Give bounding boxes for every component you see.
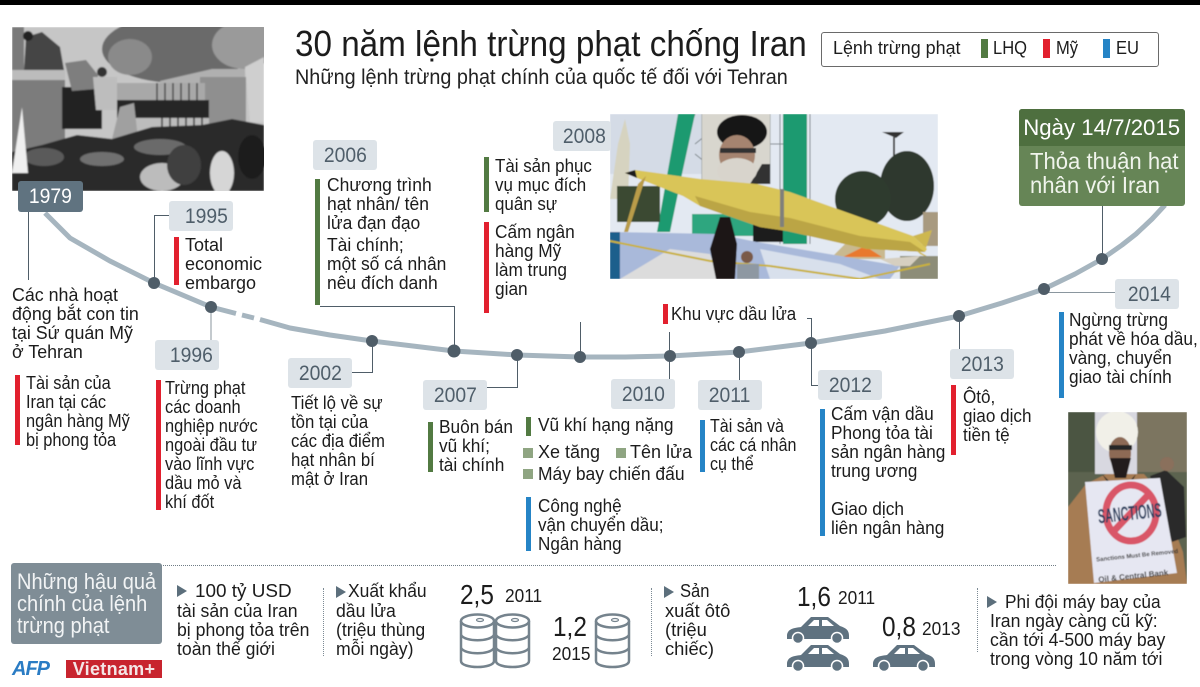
text: 1995 sanctions (185, 235, 262, 293)
year label: 2013 (950, 349, 1014, 379)
text: 1995 sanctions: embargo (185, 273, 256, 293)
number: oil 1.2: 1,2 (553, 611, 587, 642)
text: 2014 sanctions: phát về hóa dầu, (1069, 329, 1198, 349)
text: tanks: Xe tăng (538, 442, 600, 462)
square: missiles (616, 448, 626, 458)
text: 2007 sanctions: vũ khí; (439, 436, 490, 456)
text: 2008 banks: gian (495, 279, 528, 299)
year label: 2002: 2002 (299, 362, 341, 385)
legend swatch: EU blue (1103, 39, 1110, 58)
text: oil exports: Xuất khẩu (348, 581, 427, 601)
year label: 2011 (698, 380, 762, 410)
year label: 1996 (155, 340, 219, 370)
bar: 2010 US oil (663, 304, 668, 324)
year label: 2014 (1115, 279, 1179, 309)
text: 2012 interbank: liên ngân hàng (831, 518, 944, 538)
legend label: Mỹ: Mỹ (1056, 38, 1078, 58)
square: fighter planes (523, 469, 533, 479)
text: 1995 sanctions: Total (185, 235, 223, 255)
text: 2012 oil embargo: Cấm vận dầu (831, 404, 934, 424)
text: 2008 military assets: quân sự (495, 194, 557, 214)
bar: 1979 US (15, 375, 20, 445)
text: 2002 event (291, 393, 385, 489)
arc line (45, 205, 1165, 357)
callout text (1030, 148, 1179, 198)
heading text (17, 569, 156, 638)
text: 2002 event: mật ở Iran (291, 469, 368, 489)
connector lines (28, 205, 1115, 388)
text: 2008 banks: làm trung (495, 260, 567, 280)
year label: 2014: 2014 (1128, 283, 1171, 306)
text: 1979 event: ở Tehran (12, 342, 83, 362)
heading: main consequences (11, 563, 162, 644)
dotted separator (323, 588, 324, 656)
text: 2007 sanctions: tài chính (439, 455, 504, 475)
triangle: frozen assets (177, 585, 187, 597)
text: car production unit (665, 601, 730, 659)
heading text: Những hậu quả (17, 569, 156, 594)
year label: 2007: 2007 (434, 384, 476, 407)
bar: 2012 EU (820, 409, 825, 536)
text: 1979 sanctions: Iran tại các (26, 392, 106, 412)
heading text: trừng phạt (17, 613, 109, 638)
subtitle: Những lệnh trừng phạt chính của quốc tế đối với Tehran (295, 66, 788, 89)
text: 2012 oil embargo: sản ngân hàng (831, 442, 945, 462)
text: 2002 event: các địa điểm (291, 431, 385, 451)
bar: 2014 EU (1059, 312, 1064, 398)
text: 2013 sanctions: tiền tệ (963, 425, 1010, 445)
number: cars 1.6: 1,6 (797, 581, 831, 612)
year label: 1979 (18, 181, 83, 212)
text: 2002 event: Tiết lộ về sự (291, 393, 383, 413)
bar: 1995 US (174, 237, 179, 285)
text: aircraft fleet detail: Iran ngày càng cũ kỹ: (990, 611, 1158, 631)
year: oil 2011: 2011 (505, 586, 542, 606)
text: 1996 sanctions: các doanh (165, 397, 241, 417)
text: frozen assets detail: tài sản của Iran (177, 601, 298, 621)
text: 2012 oil embargo: trung ương (831, 461, 917, 481)
timeline nodes (148, 253, 1108, 363)
text: 1979 sanctions: ngân hàng Mỹ (26, 411, 130, 431)
year label: 2008 (553, 121, 611, 151)
text: oil exports unit (336, 601, 425, 659)
legend title: Lệnh trừng phạt (833, 38, 961, 58)
text: car production unit: xuất ôtô (665, 601, 730, 621)
year label: 2013: 2013 (961, 353, 1003, 376)
bar: 2011 EU (700, 420, 705, 472)
dotted separator (977, 588, 978, 652)
text: 2012 interbank (831, 499, 944, 538)
year label: 1995 (169, 201, 233, 231)
triangle: oil exports (336, 586, 346, 598)
text: 2006 nuclear program: lửa đạn đạo (327, 213, 420, 233)
text: 2012 oil embargo (831, 404, 945, 481)
triangle: aircraft fleet (987, 596, 997, 608)
year label: 2002 (288, 358, 352, 388)
text: 2007 sanctions: Buôn bán (439, 417, 513, 437)
text: frozen assets detail (177, 601, 309, 659)
text: aircraft fleet first line: Phi đội máy bay của (1005, 592, 1161, 612)
photo: sanctions protester (1068, 412, 1187, 584)
text: 2008 banks: hàng Mỹ (495, 241, 561, 261)
text: 1979 event: Các nhà hoạt (12, 285, 118, 305)
year: cars 2011: 2011 (838, 588, 875, 608)
text: 1996 sanctions: khí đốt (165, 492, 214, 512)
text: car production unit: chiếc) (665, 639, 714, 659)
text: oil exports unit: (triệu thùng (336, 620, 425, 640)
top black bar (0, 0, 1200, 5)
text: 2013 sanctions (963, 386, 1031, 445)
bar: 2013 US (951, 385, 956, 455)
text: 2002 event: tồn tại của (291, 412, 368, 432)
text: 1996 sanctions: Trừng phạt (165, 378, 245, 398)
text: 1996 sanctions: nghiệp nước (165, 416, 258, 436)
year label: 2008: 2008 (563, 125, 605, 148)
text: heavy weapons: Vũ khí hạng nặng (538, 415, 673, 435)
year label: 2010 (611, 379, 675, 409)
photo: embassy gate 1979 (12, 27, 264, 191)
text: 2002 event: hạt nhân bí (291, 450, 375, 470)
photo: missile parade (610, 114, 938, 279)
text: oil transport technology: Ngân hàng (538, 534, 622, 554)
text: aircraft fleet detail (990, 611, 1166, 669)
text: oil exports unit: dầu lửa (336, 601, 396, 621)
text: 2013 sanctions: Ôtô, (963, 387, 995, 407)
text: oil transport technology: vận chuyển dầu; (538, 515, 664, 535)
legend (821, 32, 1159, 67)
text: 1996 sanctions: dầu mỏ và (165, 473, 241, 493)
callout header date: Ngày 14/7/2015 (1024, 115, 1180, 140)
text: 2006 nuclear program (327, 175, 432, 233)
callout text: Thỏa thuận hạt (1030, 148, 1179, 174)
text: frozen assets detail: bị phong tỏa trên (177, 620, 309, 640)
icon: one car (873, 645, 935, 671)
text: 1996 sanctions: ngoài đầu tư (165, 435, 257, 455)
text: oil sector: Khu vực dầu lửa (671, 304, 796, 324)
triangle: car production (664, 586, 674, 598)
text: 2012 interbank: Giao dịch (831, 499, 904, 519)
text: 2011 sanctions: các cá nhân (710, 435, 796, 455)
text: aircraft fleet detail: cần tới 4-500 máy bay (990, 630, 1165, 650)
text: 2014 sanctions: Ngừng trừng (1069, 310, 1168, 330)
text: 2014 sanctions: giao tài chính (1069, 367, 1172, 387)
legend label: LHQ: LHQ (993, 38, 1027, 58)
number: oil 2.5: 2,5 (460, 579, 494, 610)
heading text: chính của lệnh (17, 591, 147, 616)
text: 1979 sanctions: Tài sản của (26, 373, 111, 393)
text: 2014 sanctions (1069, 310, 1198, 387)
year label: 1995: 1995 (185, 205, 227, 228)
callout text: nhân với Iran (1030, 172, 1160, 198)
icon: two oil barrels (460, 613, 530, 668)
text: 2006 finance: Tài chính; (327, 235, 404, 255)
text: 2006 nuclear program: hạt nhân/ tên (327, 194, 429, 214)
bar: 2008 UN (484, 157, 489, 212)
text: 2008 banks (495, 222, 575, 299)
text: oil transport technology: Công nghệ (538, 496, 622, 516)
year: oil 2015: 2015 (552, 644, 590, 664)
text: 2007 sanctions (439, 417, 513, 475)
text: aircraft fleet detail: trong vòng 10 năm tới (990, 649, 1162, 669)
text: frozen assets detail: toàn thế giới (177, 639, 275, 659)
photo: sanctions protester: Oil & Central Bank (1098, 568, 1169, 584)
text: frozen assets: 100 tỷ USD (195, 581, 292, 601)
text: fighter planes: Máy bay chiến đấu (538, 464, 685, 484)
text: 2008 banks: Cấm ngân (495, 222, 575, 242)
legend swatch: LHQ green (981, 39, 988, 58)
bar: 1996 US (156, 380, 161, 510)
text: 2008 military assets: Tài sản phục (495, 156, 592, 176)
legend label: EU: EU (1116, 38, 1139, 58)
year: cars 2013: 2013 (922, 619, 960, 639)
dotted separator (651, 588, 652, 656)
year label: 2006 (313, 140, 377, 170)
text: 2006 finance: nêu đích danh (327, 273, 438, 293)
logo: Vietnam+: Vietnam+ (73, 659, 155, 679)
text: 1979 event: động bắt con tin (12, 304, 139, 324)
text: 2008 military assets: vụ mục đích (495, 175, 586, 195)
text: 2008 military assets (495, 156, 592, 214)
title: 30 năm lệnh trừng phạt chống Iran (295, 23, 807, 64)
text: 1979 sanctions (26, 373, 130, 450)
text: 2013 sanctions: giao dịch (963, 406, 1031, 426)
logo: AFP: AFP (12, 658, 49, 680)
text: oil exports unit: mỗi ngày) (336, 639, 413, 659)
year label: 2012: 2012 (829, 374, 871, 397)
text: car production: Sản (680, 581, 709, 601)
legend swatch: Mỹ red (1043, 39, 1050, 58)
callout header date (1019, 109, 1185, 146)
text: 1996 sanctions (165, 378, 258, 512)
text: missiles: Tên lửa (630, 442, 692, 462)
text: 1996 sanctions: vào lĩnh vực (165, 454, 254, 474)
bar: 2010 UN weapons (526, 417, 531, 436)
year label: 2010: 2010 (622, 383, 664, 406)
year label: 1979: 1979 (29, 185, 72, 208)
text: 2011 sanctions (710, 416, 796, 474)
text: oil transport technology (538, 496, 664, 554)
callout: nuclear deal 2015 (1019, 109, 1185, 206)
text: 1979 event (12, 285, 139, 362)
bar: 2007 UN (428, 422, 433, 472)
text: 2006 nuclear program: Chương trình (327, 175, 432, 195)
year label: 2012 (818, 370, 882, 400)
text: car production unit: (triệu (665, 620, 707, 640)
bar: 2008 US (484, 222, 489, 313)
text: 1979 sanctions: bị phong tỏa (26, 430, 116, 450)
bar: 2006 UN (315, 179, 320, 305)
text: 2011 sanctions: cụ thể (710, 454, 754, 474)
text: 1995 sanctions: economic (185, 254, 262, 274)
year label: 2007 (423, 380, 487, 410)
number: cars 0.8: 0,8 (882, 611, 916, 642)
year label: 1996: 1996 (170, 344, 212, 367)
year label: 2011: 2011 (709, 384, 751, 407)
dotted divider (160, 565, 1056, 566)
square: tanks (523, 448, 533, 458)
text: 2006 finance: một số cá nhân (327, 254, 446, 274)
text: 2012 oil embargo: Phong tỏa tài (831, 423, 933, 443)
year label: 2006: 2006 (324, 144, 366, 167)
text: 1979 event: tại Sứ quán Mỹ (12, 323, 133, 343)
text: 2006 finance (327, 235, 446, 293)
icon: two cars (787, 617, 849, 671)
bar: 2010 EU (526, 497, 531, 551)
photo: sanctions protester: Sanctions Must Be Removed (1096, 549, 1179, 564)
icon: one oil barrel (594, 613, 630, 668)
text: 2014 sanctions: vàng, chuyển (1069, 348, 1172, 368)
text: 2011 sanctions: Tài sản và (710, 416, 784, 436)
